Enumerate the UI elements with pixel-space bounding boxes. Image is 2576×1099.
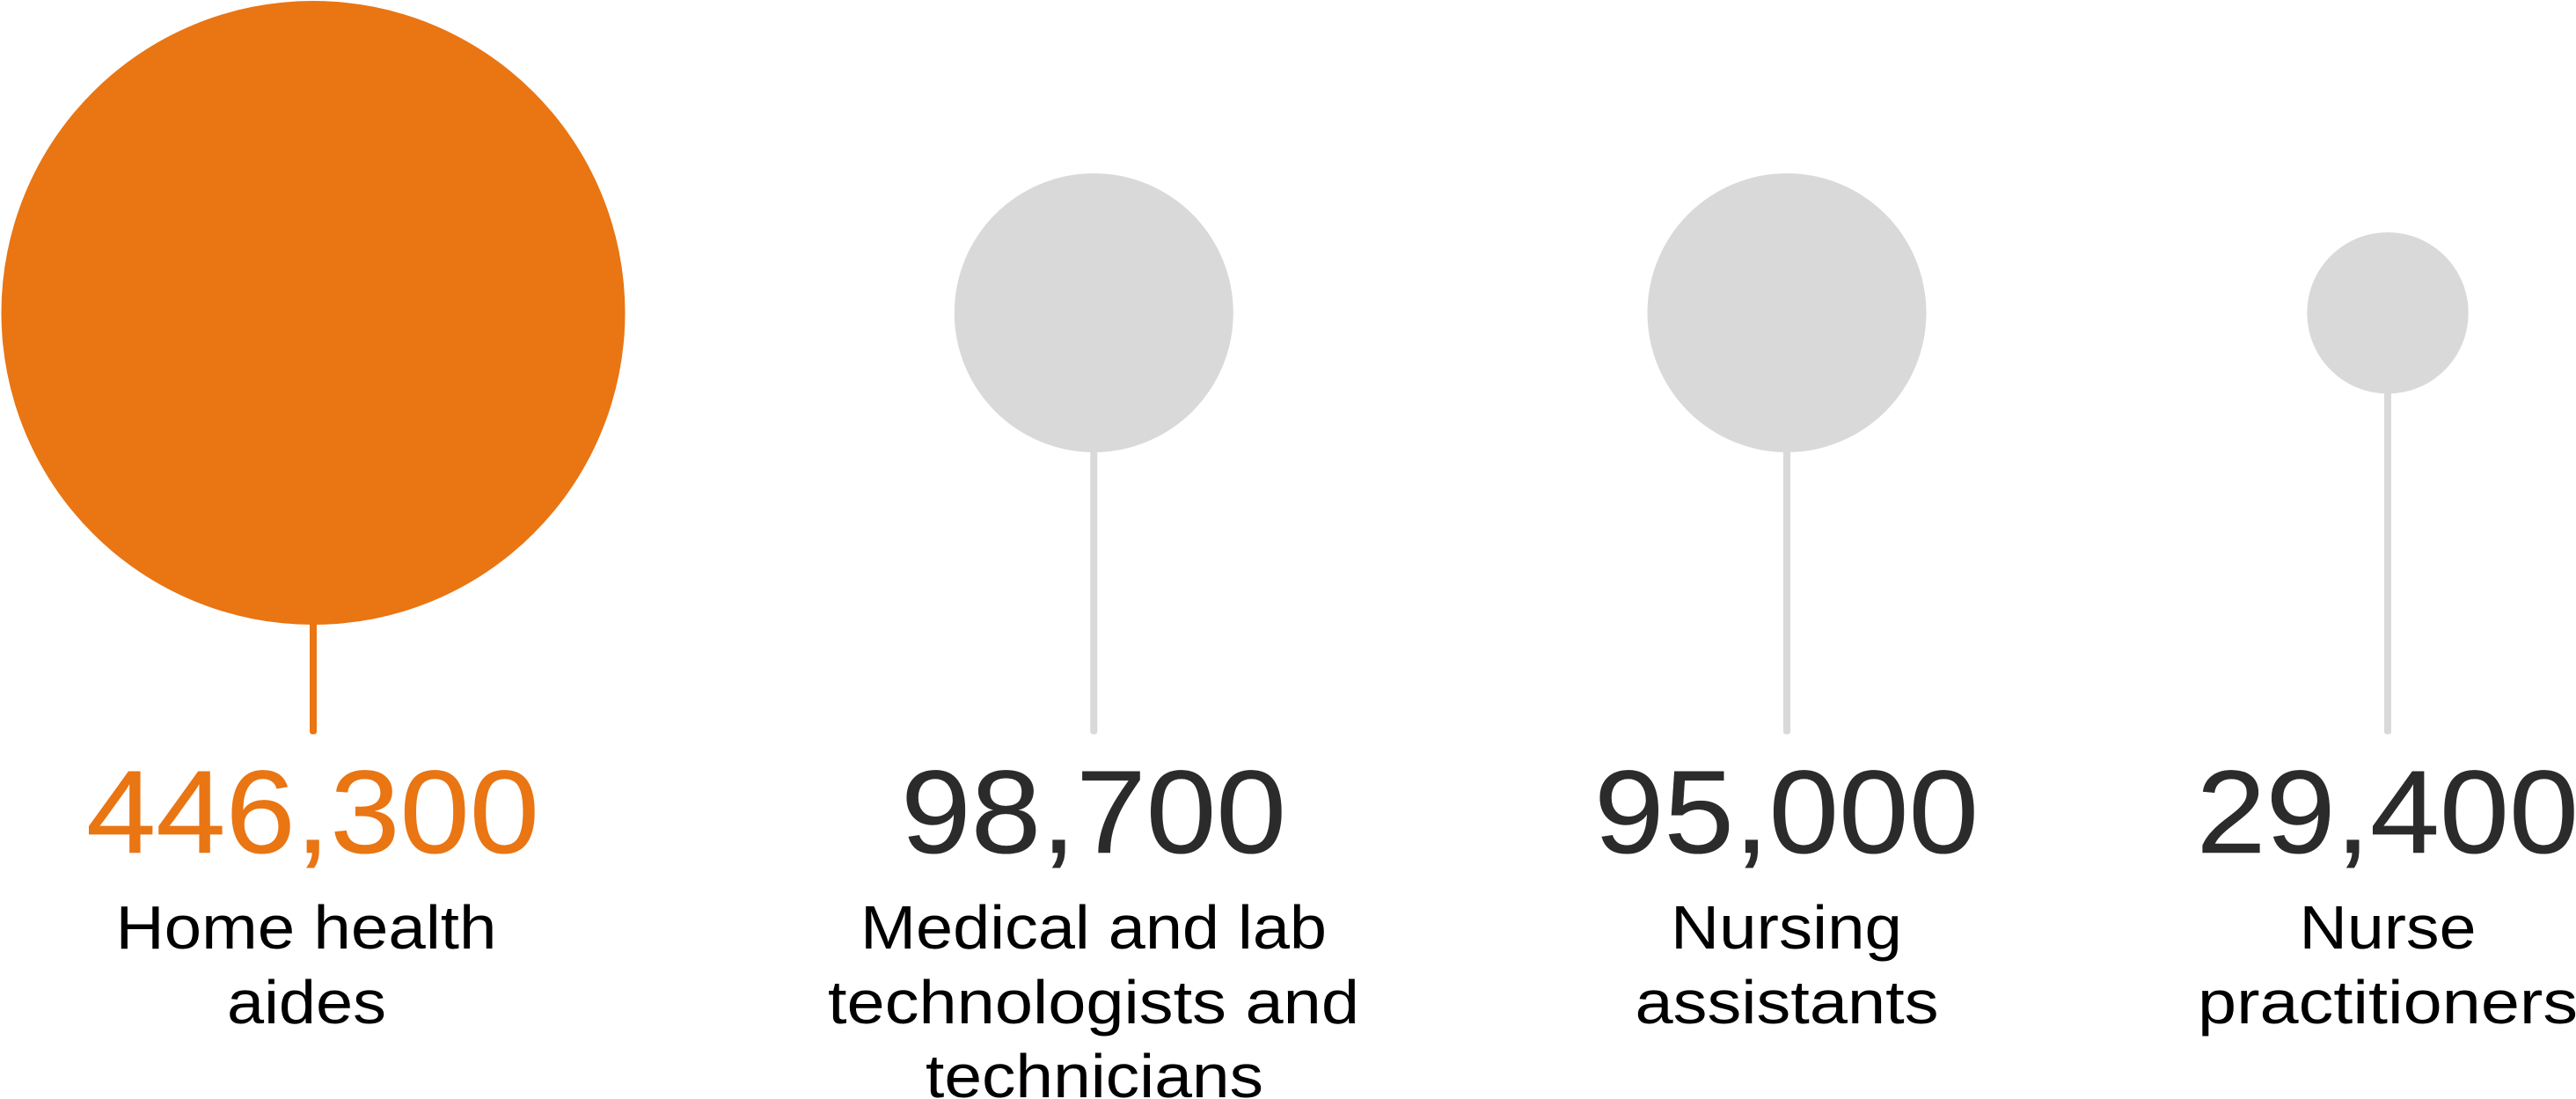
label: Home health aides (116, 893, 496, 1037)
column: home health aides (2, 1, 625, 1037)
label: Medical and lab technologists and technicians: Medical and lab (860, 893, 1327, 962)
value: 29,400: 29,400 (2196, 747, 2576, 878)
column: nursing assistants (1594, 173, 1979, 1037)
value: 95,000: 95,000 (1594, 747, 1979, 878)
value: 98,700: 98,700 (901, 747, 1286, 878)
gray stem (1783, 440, 1790, 734)
gray stem (2384, 387, 2391, 734)
label: Home health aides: aides (227, 968, 386, 1037)
orange stem (310, 616, 317, 734)
label: Home health aides: Home health (116, 893, 496, 962)
label: Nurse practitioners (2198, 893, 2576, 1037)
label: Medical and lab technologists and technicians (828, 893, 1359, 1099)
column: nurse practitioners (2196, 232, 2576, 1037)
label: Nurse practitioners: practitioners (2198, 968, 2576, 1037)
orange circle (2, 1, 625, 625)
gray circle (1647, 173, 1927, 452)
gray stem (1090, 440, 1097, 734)
label: Nursing assistants (1635, 893, 1939, 1037)
value: 446,300: 446,300 (86, 747, 539, 878)
gray circle (955, 173, 1233, 452)
column: medical and lab technologists and technicians (828, 173, 1359, 1099)
gray circle (2307, 232, 2469, 393)
label: Nurse practitioners: Nurse (2300, 893, 2476, 962)
label: Medical and lab technologists and technicians: technologists and (828, 968, 1359, 1037)
label: Nursing assistants: Nursing (1671, 893, 1902, 962)
label: Nursing assistants: assistants (1635, 968, 1939, 1037)
